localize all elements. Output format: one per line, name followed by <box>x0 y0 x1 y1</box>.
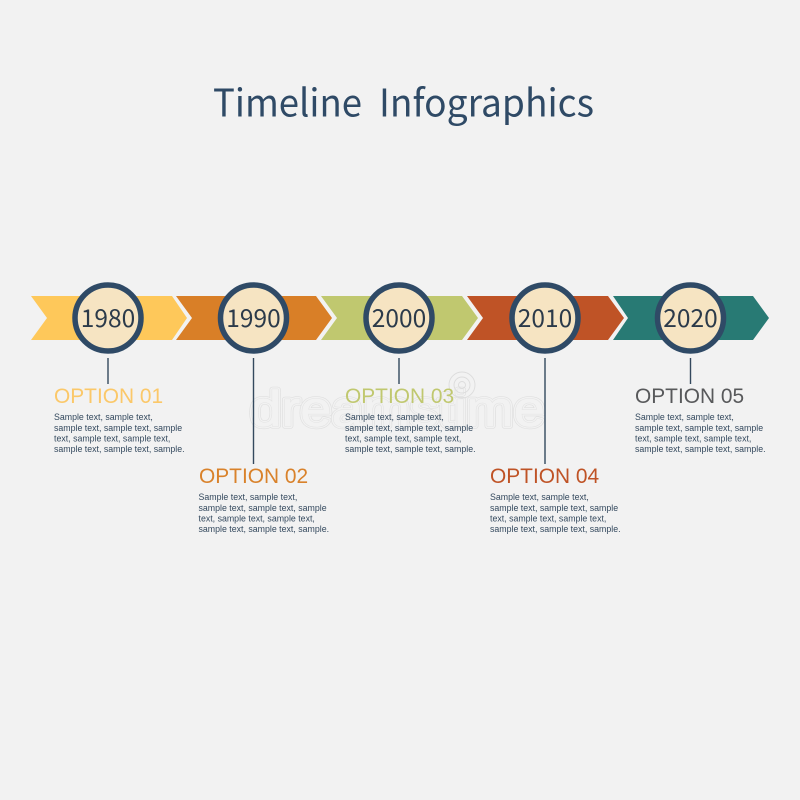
option 02: OPTION 02 <box>199 465 308 488</box>
option 02: sample text, sample text, sample <box>198 503 327 513</box>
title: Infographics <box>379 72 594 128</box>
arrow 3 <box>321 296 478 340</box>
timeline arrows <box>31 296 769 340</box>
option 04: sample text, sample text, sample. <box>490 524 621 534</box>
marker 1990: 1990 <box>226 300 281 335</box>
arrow 4 <box>467 296 624 340</box>
option 01: text, sample text, sample text, <box>54 434 170 444</box>
option 04: Sample text, sample text, <box>490 492 589 502</box>
marker 1980: 1980 <box>81 300 135 335</box>
marker 1990 <box>220 285 286 351</box>
watermark: dreamstime <box>250 381 545 437</box>
option 03: Sample text, sample text, <box>345 412 444 422</box>
marker 2000 <box>366 285 432 351</box>
option 03: sample text, sample text, sample. <box>345 444 476 454</box>
option 05: OPTION 05 <box>635 385 744 408</box>
watermark: dreamstime <box>250 381 545 437</box>
watermark: dreamstime <box>250 381 545 437</box>
option 03: text, sample text, sample text, <box>345 434 461 444</box>
watermark: dreamstime <box>250 381 545 437</box>
option 05: sample text, sample text, sample <box>635 423 763 433</box>
title: Timeline <box>213 72 362 128</box>
option 04: OPTION 04 <box>490 465 599 488</box>
arrow 2 <box>176 296 332 340</box>
option 02: Sample text, sample text, <box>198 492 297 502</box>
option 04: text, sample text, sample text, <box>490 514 606 524</box>
marker 2010: 2010 <box>518 300 572 335</box>
option 02: text, sample text, sample text, <box>198 514 315 524</box>
title <box>213 72 594 128</box>
option 05 <box>635 385 766 454</box>
marker 2020 <box>658 285 724 351</box>
option 02 <box>198 465 329 534</box>
connector 4 <box>544 358 546 464</box>
marker 1980 <box>75 285 141 351</box>
option 03: OPTION 03 <box>345 385 454 408</box>
marker 2010 <box>512 285 578 351</box>
option 04 <box>490 465 621 534</box>
connector 1 <box>107 358 109 384</box>
marker 2000: 2000 <box>372 300 426 335</box>
option 04: sample text, sample text, sample <box>490 503 618 513</box>
option 01: Sample text, sample text, <box>54 412 153 422</box>
arrow 1 <box>31 296 187 340</box>
option 05: sample text, sample text, sample. <box>635 444 766 454</box>
connector 5 <box>690 358 692 384</box>
option 01: sample text, sample text, sample. <box>54 444 185 454</box>
option 02: sample text, sample text, sample. <box>198 524 329 534</box>
option 01: sample text, sample text, sample <box>54 423 182 433</box>
arrow 5 <box>613 296 769 340</box>
option 01: OPTION 01 <box>54 385 163 408</box>
option 05: text, sample text, sample text, <box>635 434 751 444</box>
option 05: Sample text, sample text, <box>635 412 734 422</box>
marker 2020: 2020 <box>663 300 718 335</box>
option 03: sample text, sample text, sample <box>345 423 473 433</box>
option 03 <box>345 385 476 454</box>
connector 2 <box>252 358 254 464</box>
option 01 <box>54 385 185 454</box>
connector 3 <box>398 358 400 384</box>
